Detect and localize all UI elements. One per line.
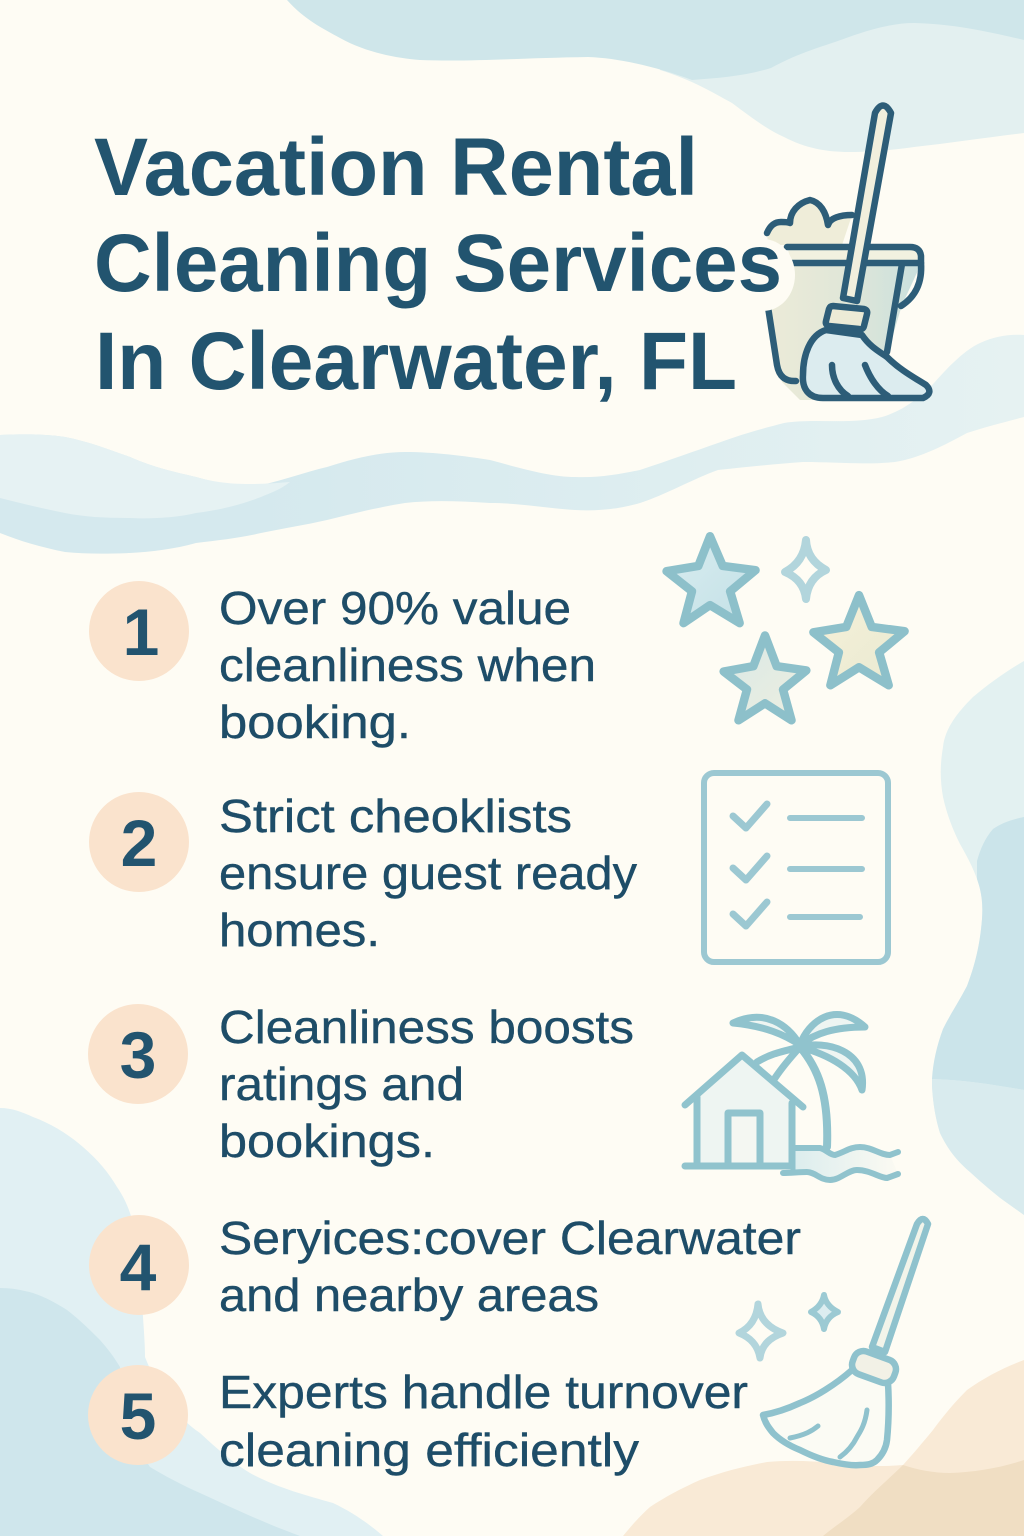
bucket body fill [768,264,921,400]
top wave light [660,0,1024,152]
bucket rim [787,247,920,263]
list item 1: Over 90% value [219,582,571,634]
list item 4: and nearby areas [219,1269,599,1321]
house [697,1057,792,1166]
trunk [800,1047,827,1147]
broom handle [872,1219,928,1352]
mop collar [826,306,867,329]
icon: broom and sparkles [739,1219,928,1465]
title: Vacation Rental [94,122,698,213]
list item 3: 3 [120,1018,156,1092]
list item 3: ratings and [219,1058,464,1110]
sparkle large [739,1304,783,1358]
title: Cleaning Services [94,218,782,309]
back frond [757,1047,800,1078]
list item 2: ensure guest ready [219,847,637,899]
list item 1: booking. [219,696,411,748]
title [94,122,782,407]
right blob lower [932,1079,1024,1215]
list item 2: Strict cheoklists [219,790,572,842]
icon: beach house and palm [685,1015,898,1180]
bucket side [768,307,796,381]
list item 3 [88,1001,634,1167]
list item 2 [89,790,637,956]
list item 3: bookings. [219,1115,435,1167]
middle wave left light [0,434,290,518]
fronds [733,1017,800,1045]
foam [767,200,852,245]
list item 5: 5 [120,1379,156,1453]
title: In Clearwater, FL [95,316,737,407]
bottom right peach light [623,1360,1024,1536]
right blob light [932,661,1024,1215]
list item 1: cleanliness when [219,639,596,691]
middle wave [0,335,1024,554]
list item 5: Experts handle turnover [219,1366,748,1418]
bottom right peach dark [823,1460,1024,1536]
list item 3: Cleanliness boosts [219,1001,634,1053]
list item 1: 1 [123,595,159,669]
list item 1 [89,581,596,748]
list item 4: Seryices:cover Clearwater [219,1212,801,1264]
mop head [803,330,929,398]
broom collar [849,1348,899,1386]
broom strands [790,1410,867,1457]
list item 5: cleaning efficiently [219,1424,639,1476]
right blob dark [932,817,1024,1090]
list item 2: homes. [219,904,380,956]
sparkle small [811,1295,838,1329]
icon: mop and bucket [731,106,929,400]
water [793,1147,898,1180]
list item 5 [88,1365,748,1476]
list item 4: 4 [120,1230,157,1304]
icon: checklist [704,773,888,962]
halo around title [731,239,795,311]
bottom left blob light [0,1108,383,1536]
mop handle [843,106,891,301]
list item 4 [89,1212,801,1321]
list item 2: 2 [121,806,157,880]
icon: stars and sparkle [667,536,905,720]
top wave dark [287,0,1024,80]
bottom left blob dark [0,1288,300,1536]
broom head [763,1370,889,1465]
